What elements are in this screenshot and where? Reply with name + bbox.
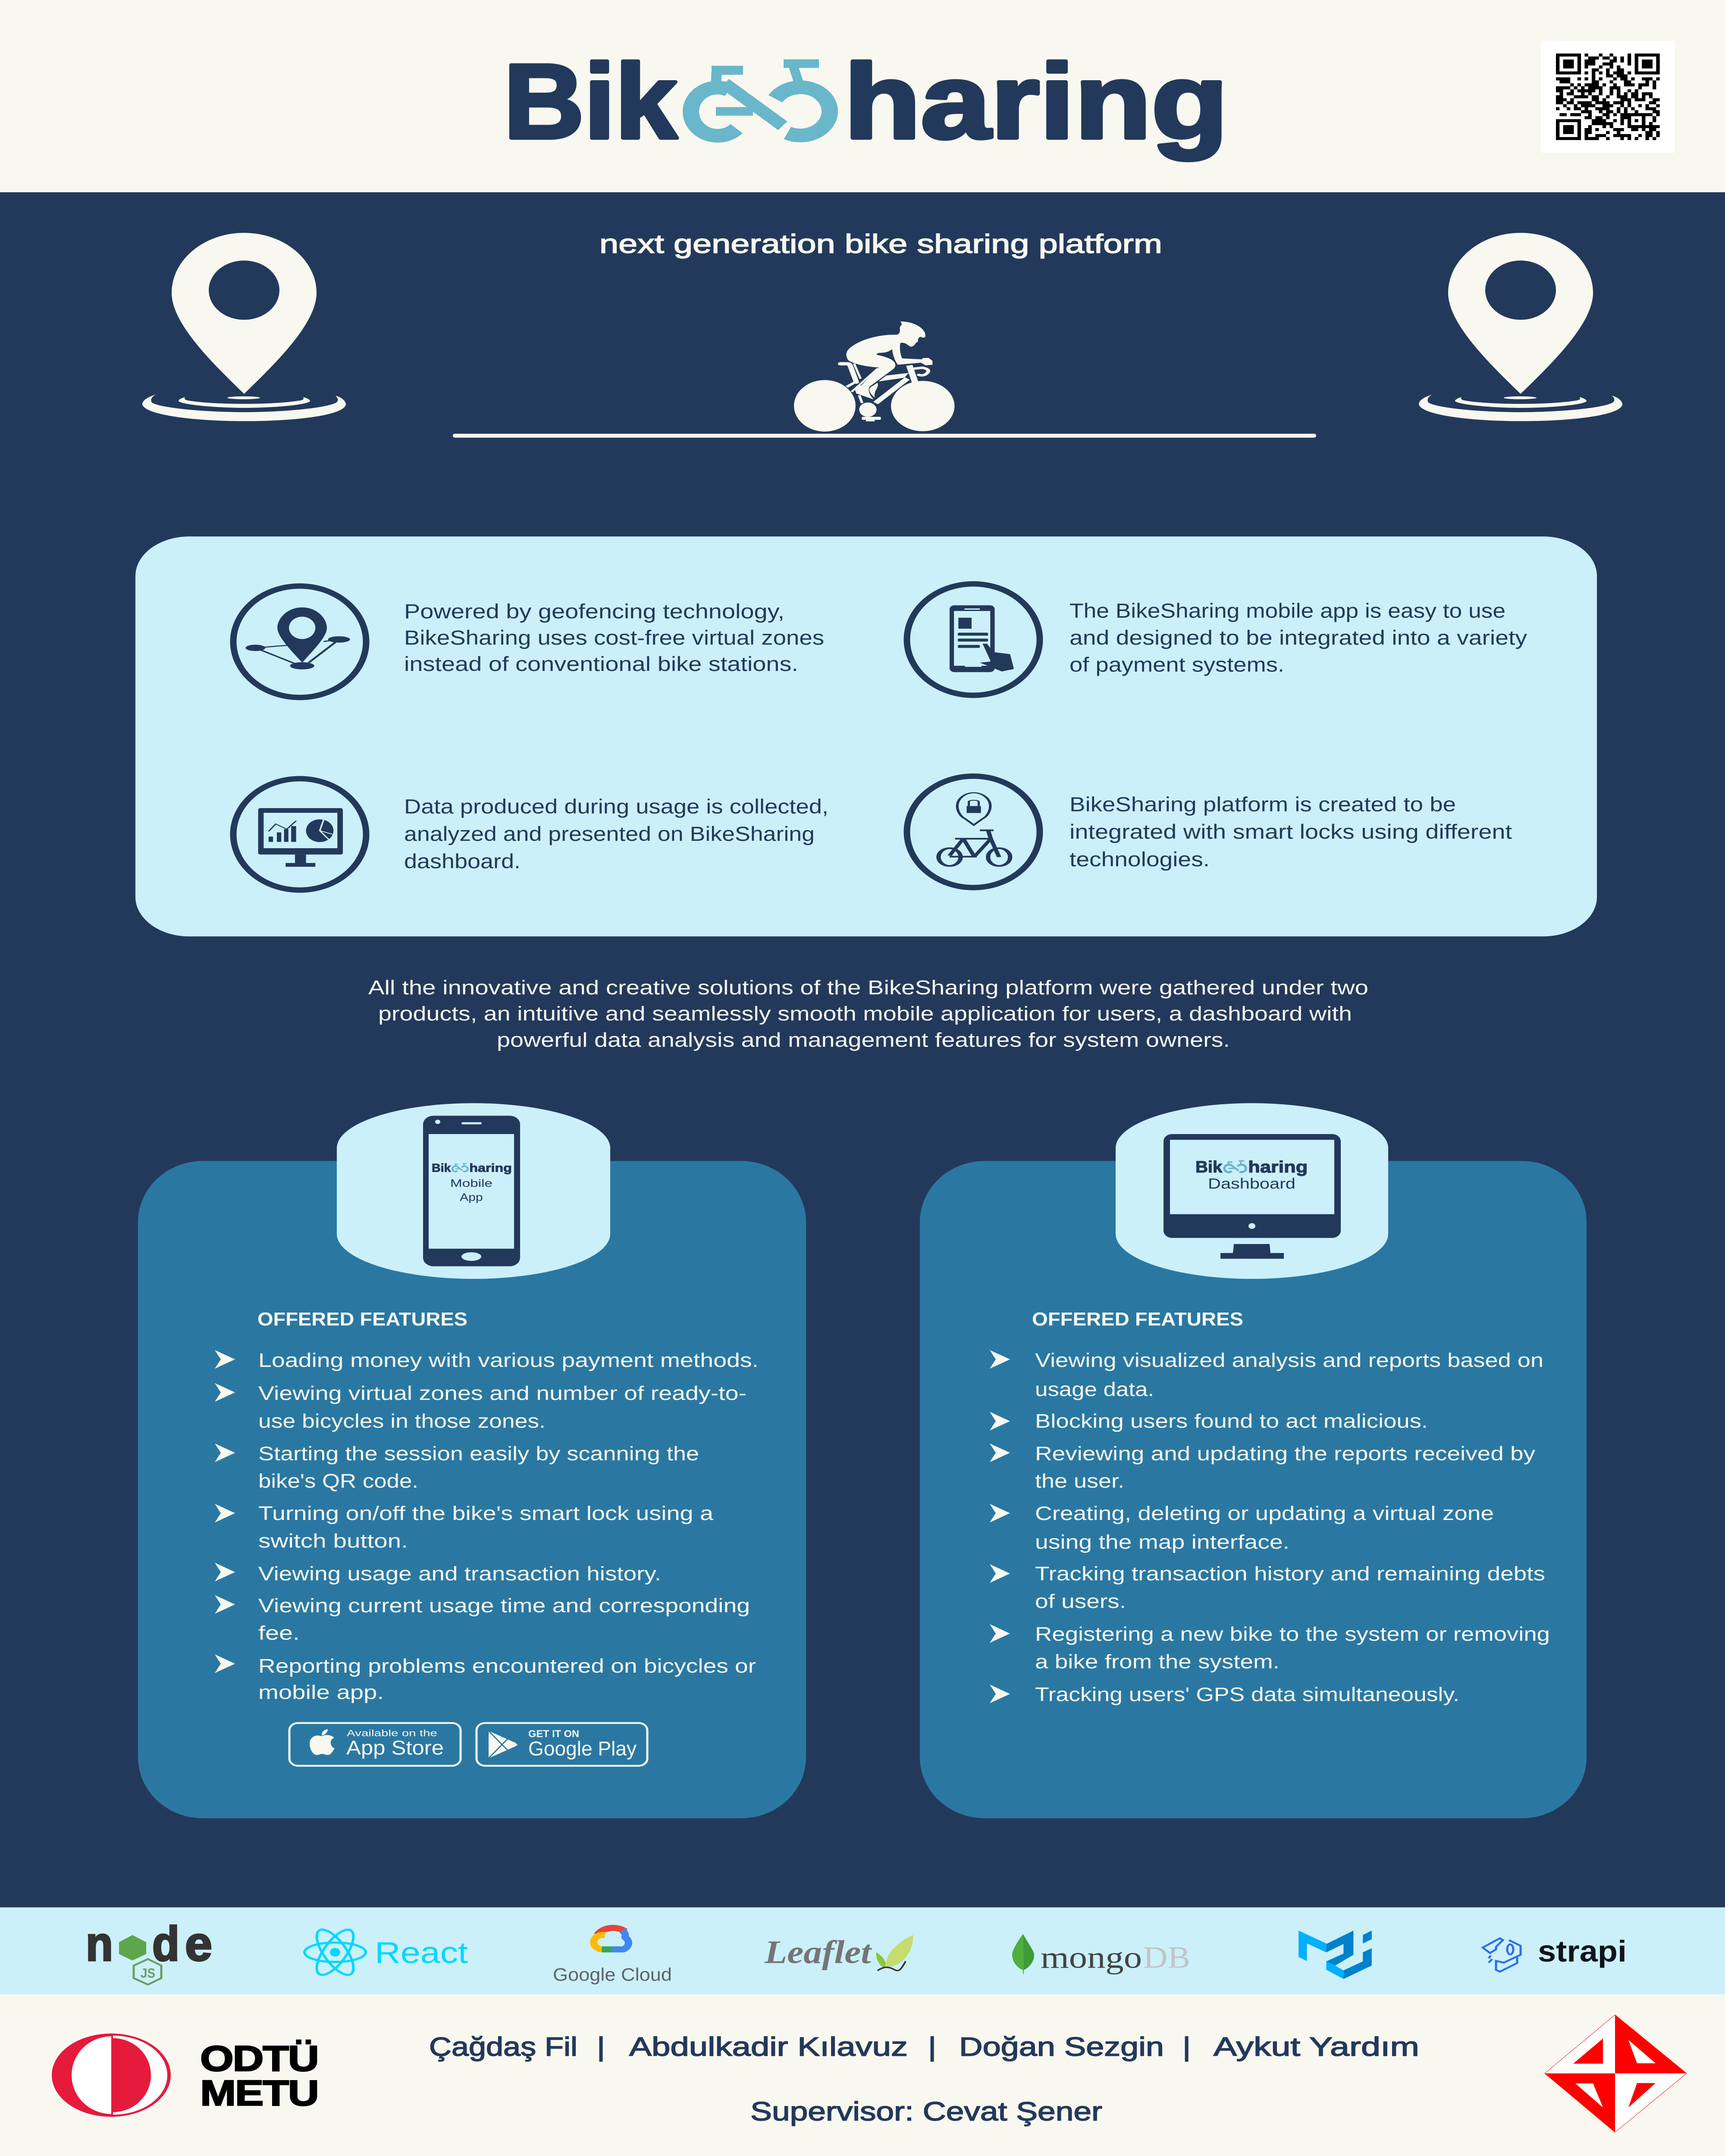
team names: |: [1182, 2032, 1191, 2062]
button: App Store: Available on the: [347, 1728, 437, 1739]
hero tagline: next generation bike sharing platform: [599, 229, 1162, 259]
team names: [429, 2032, 1419, 2062]
icon: logo bicycle: [691, 60, 830, 136]
button: Google Play: GET IT ON: [528, 1728, 579, 1739]
footer band: [0, 1994, 1725, 2156]
heading: offered features: OFFERED FEATURES: [1032, 1309, 1243, 1330]
button: App Store: [289, 1723, 461, 1766]
small logo: mobile app: Bik: [432, 1162, 451, 1175]
text: geofencing: instead of conventional bike stations.: [404, 653, 798, 676]
feature list: dashboard: Viewing visualized analysis and reports based on: [1035, 1349, 1543, 1371]
icon: apple: [310, 1729, 335, 1755]
logo: node js: n: [86, 1917, 113, 1971]
feature list: mobile: bike's QR code.: [258, 1470, 418, 1492]
logo: mongodb: DB: [1143, 1940, 1190, 1975]
intro paragraph: [368, 976, 1368, 1051]
feature list: dashboard: of users.: [1035, 1590, 1126, 1612]
badge: phone: [337, 1103, 610, 1279]
feature list: mobile: [258, 1349, 759, 1703]
feature list: dashboard: Reviewing and updating the reports received by: [1035, 1442, 1536, 1465]
road line: [453, 434, 1316, 438]
text: smart lock bike: technologies.: [1070, 849, 1210, 871]
icon: dashboard: [233, 779, 366, 890]
logo: leaflet: Leaflet: [764, 1934, 872, 1971]
text: smart lock bike: BikeSharing platform is created to be: [1070, 793, 1456, 816]
feature list: dashboard: Tracking transaction history and remaining debts: [1035, 1562, 1545, 1585]
feature list: mobile: Turning on/off the bike's smart lock using a: [258, 1502, 714, 1524]
logo: react: [304, 1925, 468, 1979]
text: dashboard: [404, 796, 828, 873]
logo: material ui: [1298, 1930, 1372, 1979]
logo: node js: JS: [141, 1966, 155, 1981]
text: dashboard: Data produced during usage is collected,: [404, 796, 828, 818]
panel: platform highlights: [135, 536, 1597, 937]
small logo: mobile app: haring: [469, 1162, 512, 1175]
icon: smart lock bike: [907, 776, 1040, 887]
logo: BikeSharing: haring: [844, 42, 1228, 161]
team names: |: [597, 2032, 605, 2062]
QR code: [1541, 41, 1675, 153]
button: Google Play: [477, 1723, 647, 1766]
logo: node js: e: [185, 1917, 212, 1971]
feature list: dashboard: Registering a new bike to the system or removing: [1035, 1623, 1550, 1645]
icon: left location pin: [142, 233, 346, 421]
logo: google cloud: [553, 1928, 672, 1984]
feature list: mobile: Reporting problems encountered on bicycles or: [258, 1655, 756, 1677]
feature list: mobile: Viewing virtual zones and number of ready-to-: [258, 1382, 746, 1404]
intro paragraph: products, an intuitive and seamlessly smooth mobile application for users, a dashboard with: [378, 1002, 1352, 1025]
feature list: mobile: Viewing usage and transaction history.: [258, 1562, 661, 1585]
feature list: dashboard: using the map interface.: [1035, 1531, 1289, 1553]
bullet chevrons: [990, 1350, 1010, 1703]
bullet chevrons: [215, 1350, 235, 1673]
feature list: mobile: Viewing current usage time and corresponding: [258, 1595, 750, 1617]
text: geofencing: Powered by geofencing technology,: [404, 601, 784, 623]
logo: department emblem: [1545, 2015, 1687, 2132]
text: mobile app: The BikeSharing mobile app is easy to use: [1070, 600, 1505, 622]
button: App Store: App Store: [346, 1736, 444, 1759]
feature list: mobile: Loading money with various payment methods.: [258, 1349, 759, 1371]
icon: phone: [423, 1116, 520, 1266]
logo: mongodb: [1012, 1934, 1190, 1975]
logo: BikeSharing: Bik: [504, 42, 678, 161]
logo: mongodb: mongo: [1041, 1940, 1142, 1975]
small logo: dashboard: Bik: [1195, 1158, 1223, 1176]
team names: |: [928, 2032, 936, 2062]
label: mobile app: Mobile: [450, 1177, 492, 1189]
feature list: dashboard: usage data.: [1035, 1378, 1154, 1400]
intro paragraph: powerful data analysis and management features for system owners.: [497, 1028, 1230, 1051]
icon: monitor: [1164, 1134, 1341, 1259]
feature list: dashboard: a bike from the system.: [1035, 1651, 1280, 1673]
feature list: mobile: switch button.: [258, 1530, 408, 1552]
logo: METU emblem: [50, 2031, 172, 2119]
logo: strapi: [1483, 1935, 1627, 1971]
logo: node js: [86, 1917, 212, 1984]
logo: METU wordmark: ODTÜ: [200, 2038, 319, 2079]
feature list: mobile: fee.: [258, 1622, 300, 1644]
feature list: mobile: Starting the session easily by scanning the: [258, 1442, 699, 1465]
text: geofencing: [404, 601, 824, 676]
icon: mobile app: [907, 584, 1040, 695]
intro paragraph: All the innovative and creative solutions of the BikeSharing platform were gathered under two: [368, 976, 1368, 999]
team names: Doğan Sezgin: [959, 2032, 1164, 2062]
team names: Çağdaş Fil: [429, 2032, 577, 2062]
technology logos band: [0, 1907, 1725, 1994]
feature list: dashboard: [1035, 1349, 1550, 1705]
logo: METU wordmark: [200, 2038, 319, 2113]
label: mobile app: App: [460, 1191, 483, 1203]
logo: node js: d: [152, 1917, 179, 1971]
logo: react: React: [375, 1936, 468, 1970]
small logo: dashboard: haring: [1248, 1158, 1308, 1176]
feature list: dashboard: Creating, deleting or updating a virtual zone: [1035, 1502, 1494, 1524]
text: smart lock bike: [1070, 793, 1512, 871]
header band: [0, 0, 1725, 192]
text: geofencing: BikeSharing uses cost-free virtual zones: [404, 627, 824, 649]
logo: google cloud: Google Cloud: [553, 1964, 672, 1984]
label: dashboard: Dashboard: [1208, 1175, 1295, 1192]
feature list: dashboard: Tracking users' GPS data simultaneously.: [1035, 1683, 1459, 1705]
text: dashboard: dashboard.: [404, 850, 521, 873]
small logo: dashboard: [1195, 1158, 1308, 1176]
feature list: mobile: mobile app.: [258, 1681, 384, 1703]
team names: Abdulkadir Kılavuz: [629, 2032, 908, 2062]
team names: Aykut Yardım: [1214, 2032, 1419, 2062]
logo: strapi: strapi: [1538, 1935, 1627, 1968]
text: smart lock bike: integrated with smart locks using different: [1070, 821, 1512, 843]
icon: geofencing: [233, 586, 366, 698]
feature list: dashboard: Blocking users found to act malicious.: [1035, 1410, 1428, 1432]
icon: play triangle: [489, 1731, 518, 1758]
icon: right location pin: [1419, 233, 1622, 421]
logo: METU wordmark: METU: [200, 2073, 319, 2113]
logo: BikeSharing: [504, 42, 1228, 161]
feature list: dashboard: the user.: [1035, 1470, 1124, 1492]
icon: cyclist: [794, 322, 954, 432]
text: dashboard: analyzed and presented on BikeSharing: [404, 823, 815, 846]
label: mobile app: [450, 1177, 492, 1203]
feature list: mobile: use bicycles in those zones.: [258, 1410, 546, 1432]
heading: offered features: OFFERED FEATURES: [257, 1309, 467, 1330]
supervisor: Supervisor: Cevat Şener: [750, 2096, 1102, 2126]
text: mobile app: of payment systems.: [1070, 654, 1284, 676]
panel: dashboard features: [920, 1103, 1587, 1818]
button: Google Play: Google Play: [528, 1737, 637, 1760]
text: mobile app: [1070, 600, 1527, 676]
small logo: mobile app: [432, 1162, 512, 1175]
panel: mobile app features: [138, 1103, 806, 1818]
badge: monitor: [1116, 1103, 1388, 1279]
text: mobile app: and designed to be integrated into a variety: [1070, 627, 1527, 649]
